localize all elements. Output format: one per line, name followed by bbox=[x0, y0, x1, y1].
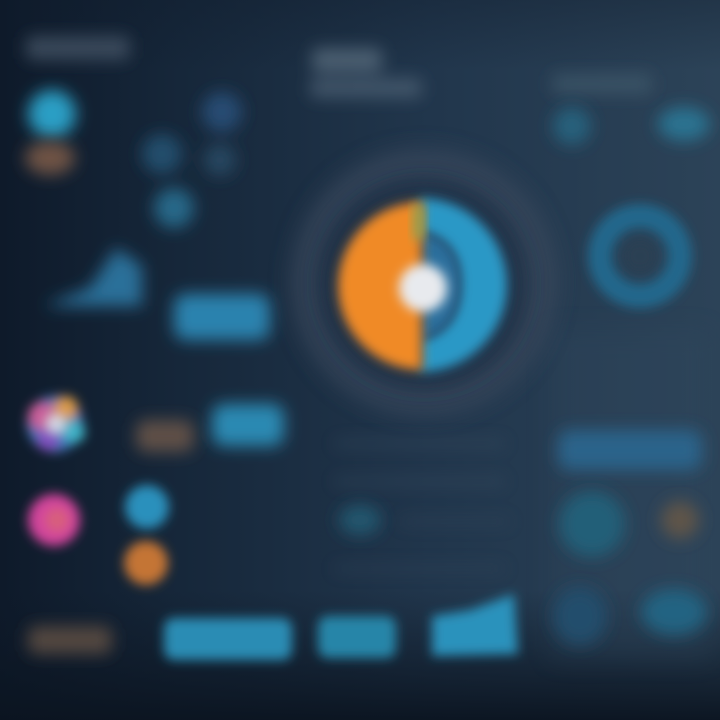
icon: orange dot bbox=[124, 541, 168, 585]
icon: pink dot bbox=[28, 494, 80, 546]
panel: second column bbox=[124, 92, 292, 660]
icon: brown dot bbox=[25, 141, 75, 175]
label: brown bar bbox=[28, 626, 112, 654]
icons: small blue dots bbox=[142, 92, 242, 228]
bar: wide blue bbox=[558, 430, 702, 470]
icon: brown dot bbox=[661, 501, 699, 539]
slice: blue bbox=[420, 198, 507, 372]
icon: bottom teal dot bbox=[553, 587, 607, 645]
chart: bottom area bbox=[432, 594, 518, 656]
ring: outer halo bbox=[306, 164, 542, 400]
icons: top pair bbox=[553, 107, 710, 145]
slice: orange bbox=[338, 202, 422, 370]
icon: cyan dot bbox=[28, 90, 76, 138]
panel: left column icons bbox=[25, 90, 142, 654]
bar: blue wide bbox=[174, 294, 270, 340]
icon: teal dot bbox=[559, 491, 625, 557]
disc: inner dark bbox=[324, 185, 524, 385]
slice: green seam bbox=[413, 205, 424, 239]
icon: multicolour dot bbox=[27, 396, 85, 452]
heading: right bbox=[552, 74, 652, 94]
icon: small teal dot bbox=[339, 505, 381, 535]
icon: bottom teal pill bbox=[641, 589, 707, 635]
heading: centre bbox=[310, 48, 422, 98]
chart: small donut bbox=[600, 216, 680, 296]
panel: right column bbox=[553, 107, 710, 645]
bar: blue bbox=[212, 404, 284, 446]
text lines bbox=[335, 440, 510, 572]
panel: lower centre bbox=[318, 440, 518, 658]
heading: left bbox=[26, 36, 130, 60]
bar: brown bbox=[136, 420, 194, 452]
slice: blue inner shade bbox=[420, 232, 460, 340]
chart: central donut bbox=[306, 164, 542, 400]
bar: bottom blue small bbox=[318, 616, 396, 658]
chart: small area bbox=[44, 248, 142, 306]
bar: bottom blue bbox=[164, 618, 292, 660]
icon: blue dot bbox=[125, 485, 169, 529]
hub bbox=[399, 264, 447, 312]
panel: top headings bbox=[26, 36, 652, 98]
